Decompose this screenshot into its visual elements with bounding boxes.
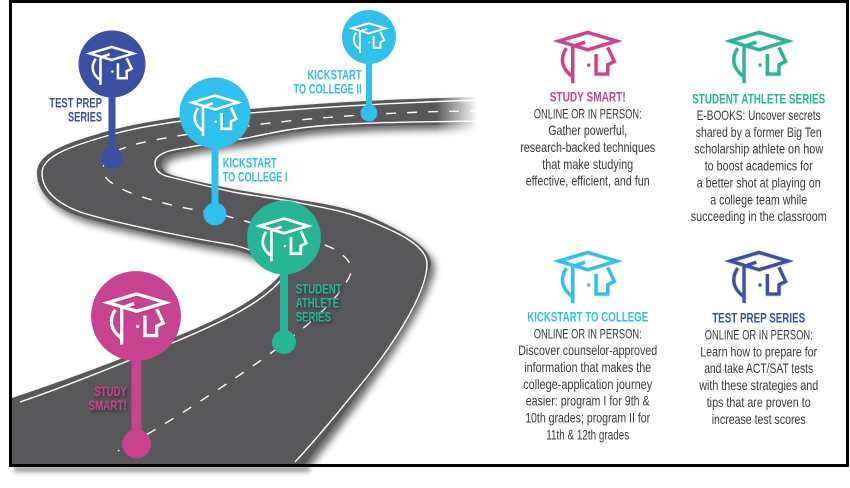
label: kickstart to college II: [293, 66, 362, 96]
text: study smart description: [520, 105, 655, 189]
text: kickstart description: easier: program I for 9th &: [526, 393, 650, 409]
text: test prep description: [698, 326, 818, 427]
text: kickstart description: Discover counselor-approved: [518, 342, 657, 358]
text: kickstart description: 10th grades; program II for: [525, 410, 650, 426]
text: test prep description: tips that are proven to: [707, 394, 811, 410]
text: study smart description: effective, efficient, and fun: [526, 173, 650, 189]
heading: study smart: STUDY SMART!: [550, 89, 626, 105]
label: student athlete series: STUDENT: [296, 280, 342, 296]
label: study smart: STUDY: [94, 383, 127, 399]
pin: study smart: [91, 271, 181, 458]
text: test prep description: Learn how to prepare for: [700, 343, 817, 359]
panel: student athlete series: [691, 32, 827, 224]
icon: study smart cap: [559, 32, 617, 83]
pin: test prep series: [78, 30, 146, 169]
panel: study smart: [520, 32, 655, 189]
panel: kickstart to college: [518, 252, 657, 442]
text: student athlete description: [691, 107, 827, 224]
label: study smart: SMART!: [88, 397, 127, 413]
label: test prep series: TEST PREP: [49, 95, 102, 111]
label: study smart: [88, 383, 127, 413]
road: [12, 97, 484, 471]
label: student athlete series: [296, 280, 342, 324]
label: kickstart to college I: KICKSTART: [223, 154, 277, 170]
icon: test prep cap: [730, 252, 788, 303]
text: kickstart description: information that makes the: [524, 359, 651, 375]
icon: kickstart cap: [559, 252, 617, 303]
text: study smart description: that make studying: [542, 156, 633, 172]
icon: student athlete cap: [730, 32, 788, 83]
label: kickstart to college I: TO COLLEGE I: [223, 168, 287, 184]
text: study smart description: ONLINE OR IN PERSON:: [534, 105, 642, 121]
text: test prep description: increase test scores: [712, 411, 806, 427]
text: kickstart description: [518, 325, 657, 442]
text: test prep description: with these strategies and: [698, 377, 818, 393]
heading: kickstart to college: KICKSTART TO COLLEGE: [527, 309, 648, 325]
text: study smart description: Gather powerful,: [548, 122, 627, 138]
label: kickstart to college I: [223, 154, 287, 184]
panel: test prep series: [698, 252, 818, 427]
text: kickstart description: 11th & 12th grades: [546, 426, 629, 442]
label: kickstart to college II: TO COLLEGE II: [293, 80, 362, 96]
text: kickstart description: ONLINE OR IN PERSON:: [534, 325, 642, 341]
pin: kickstart to college I: [180, 78, 250, 226]
text: study smart description: research-backed techniques: [520, 139, 655, 155]
text: student athlete description: to boost academics for: [705, 158, 813, 174]
text: test prep description: and take ACT/SAT tests: [704, 360, 813, 376]
text: kickstart description: college-application journey: [523, 376, 652, 392]
pin: student athlete series: [247, 200, 321, 354]
label: kickstart to college II: KICKSTART: [307, 66, 362, 82]
frame shadow: [14, 466, 310, 472]
text: student athlete description: a college team while: [710, 191, 807, 207]
label: student athlete series: ATHLETE: [296, 294, 339, 310]
label: test prep series: SERIES: [68, 109, 102, 125]
heading: test prep series: TEST PREP SERIES: [712, 310, 805, 326]
pin: kickstart to college II: [342, 10, 396, 122]
label: student athlete series: SERIES: [296, 308, 331, 324]
label: test prep series: [49, 95, 102, 125]
